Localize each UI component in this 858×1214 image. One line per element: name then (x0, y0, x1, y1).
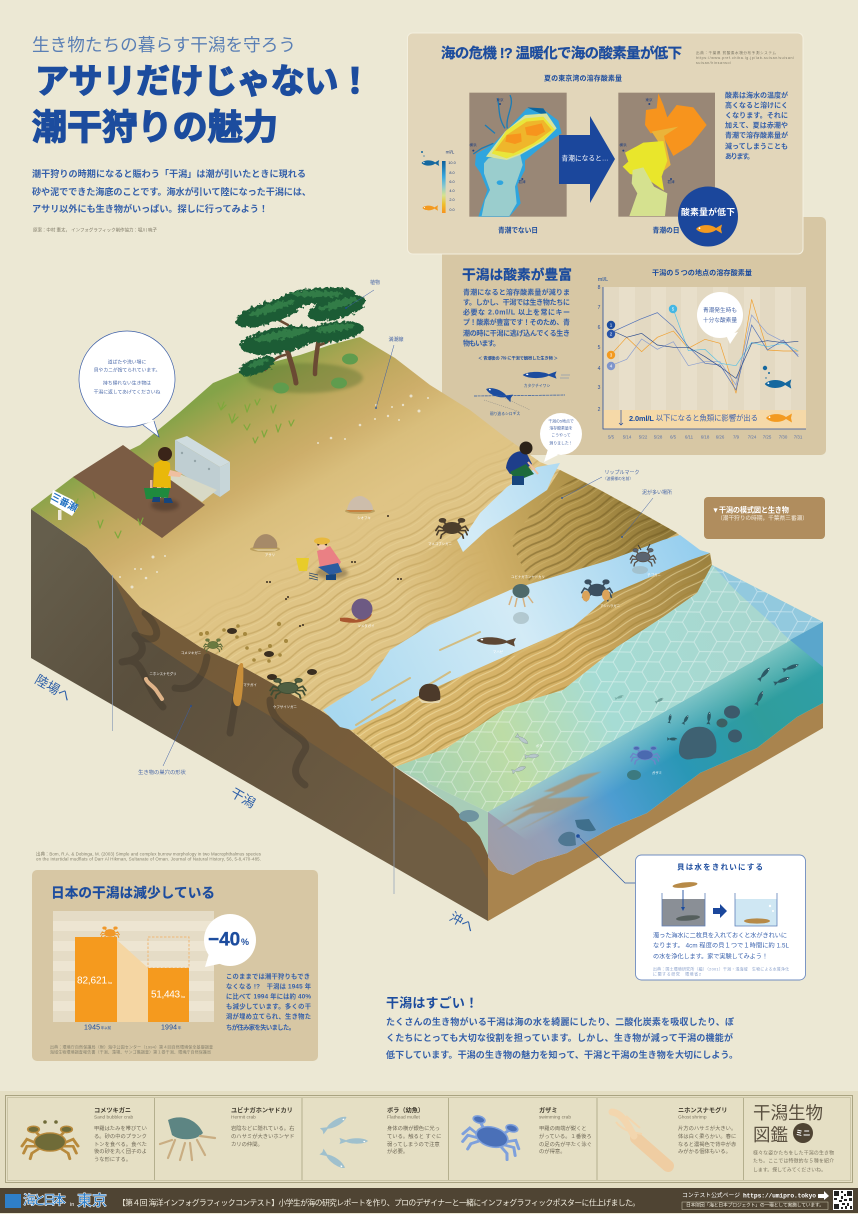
source: https://www.pref.chiba.lg.jp/lab-suisan/suisan/ (696, 56, 794, 60)
line chart: dissolved oxygen at five sites: 6/26 (716, 434, 725, 440)
top surface: hill and beach (31, 337, 712, 767)
creature labels: ガザミ (652, 770, 662, 775)
annotation lines and labels: 泥が多い場所 (642, 489, 672, 496)
logo: 東京 (77, 1192, 107, 1210)
source: burrow: 出典：Bom, R.A. & Dobinga, M. (2003) Simple and complex burrow morphology in two Macrophthalmus species (36, 850, 262, 858)
heading: 日本の干潟は減少している (51, 884, 215, 900)
legend: 6.0 (449, 180, 455, 184)
grass clumps (273, 354, 358, 394)
rocks and clams in the water (459, 706, 742, 846)
guide title: たち。ここでは特徴的な５種を紹介 (753, 1158, 834, 1164)
body text (463, 288, 570, 348)
line chart: dissolved oxygen at five sites: 6/11 (685, 434, 694, 440)
creature labels: ケフサイソガニ (273, 704, 297, 709)
icon: orange fish (766, 414, 792, 422)
guide title: ミニ (796, 1128, 810, 1138)
icon: clam (345, 496, 375, 514)
line chart: dissolved oxygen at five sites: 4 (610, 364, 613, 368)
subtitle: 生き物たちの暮らす干潟を守ろう (32, 35, 296, 55)
heading: 海の危機 !? 温暖化で海の酸素量が低下 (441, 44, 682, 62)
threshold label (619, 410, 758, 425)
card: swimming crab: のが得意。 (539, 1147, 566, 1155)
text block: tidal flats are amazing (386, 996, 738, 1060)
guide title: 干潟生物 (753, 1103, 823, 1123)
logo: in (70, 1202, 74, 1208)
experiment illustration (662, 881, 777, 926)
line chart: dissolved oxygen at five sites: 5 (598, 345, 601, 351)
source: 出典：千葉県 貧酸素水塊分布予測システム (696, 50, 776, 55)
guide title (753, 1103, 834, 1174)
line chart: dissolved oxygen at five sites: 1 (610, 322, 613, 328)
card: sand bubbler crab: うな形にする。 (94, 1155, 131, 1163)
annotation lines and labels: （波模様の名前） (603, 476, 633, 481)
seabed weeds (497, 772, 602, 832)
source: suisan/hinsanso/ (696, 61, 731, 65)
creature labels: ニホンスナモグリ (149, 671, 177, 676)
creature labels (149, 515, 662, 775)
card: flathead mullet: Flathead mullet (387, 1114, 420, 1120)
guide title: します。探してみてくださいね。 (753, 1166, 826, 1174)
wash station (168, 436, 230, 502)
icon: mud-dwelling crabs (270, 678, 306, 698)
callout: 青潮発生時も (703, 306, 737, 314)
line chart: dissolved oxygen at five sites: 3 (610, 352, 613, 358)
caption left: 青潮でない日 (498, 226, 538, 234)
card: flathead mullet (319, 1106, 441, 1171)
card: swimming crab (459, 1106, 592, 1162)
bar chart: ha (108, 981, 112, 985)
arrow: blue tide (559, 116, 615, 203)
map labels (469, 97, 526, 184)
icon: swimming crab (631, 747, 659, 764)
callout: -40%: % (241, 937, 249, 947)
card: hermit crab: ユビナガホンヤドカリ (231, 1106, 293, 1114)
sand bottom, right face (488, 703, 823, 921)
icon: dark crab (436, 518, 468, 538)
card: ghost shrimp: 片方のハサミが大きい。 (678, 1124, 736, 1132)
heading: 貝は水をきれいにする (677, 862, 763, 872)
card: sand bubbler crab: る。砂の中のプランク (94, 1132, 147, 1140)
line chart: dissolved oxygen at five sites: 4 (598, 366, 601, 372)
callout: wash station message: 持ち帰れない生き物は (103, 380, 151, 386)
creature labels: アシハラガニ (600, 603, 620, 608)
title: 潮干狩りの魅力 (32, 108, 278, 148)
text block: tidal flats are amazing: たくさんの生き物がいる干潟は海の水を綺麗にしたり、二酸化炭素を吸収したり、ぼ (386, 1016, 734, 1027)
line chart: dissolved oxygen at five sites: 7/31 (794, 434, 803, 440)
badge: oxygen falls: 酸素量が低下 (681, 206, 735, 217)
callout: wash station message: 干潟に返してあげてくださいね (94, 388, 161, 396)
line chart: dissolved oxygen at five sites: 2 (598, 407, 601, 413)
bar chart: 1945 (84, 1024, 100, 1032)
burrow holes and pellets (199, 515, 402, 680)
map labels: 君津 (667, 179, 675, 184)
icon: blue-grey crab (582, 580, 612, 602)
card: hermit crab: Hermit crab (231, 1114, 256, 1120)
creature labels: マテガイ (243, 682, 257, 687)
arrow: blue tide: 青潮になると… (562, 154, 608, 162)
text block: tidal flats are amazing: 低下しています。干潟の生き物の魅力を知って、干潟と干潟の生き物を大切にしよう。 (386, 1049, 738, 1060)
card: hermit crab (160, 1106, 295, 1160)
icon: razor clam (233, 663, 243, 706)
official page: https://umipro.tokyo (743, 1192, 816, 1200)
direction labels: 陸場へ (32, 672, 74, 704)
tag: diagram caption (704, 497, 825, 539)
body text: このままでは潮干狩りもでき (226, 972, 310, 980)
water side, left (395, 767, 488, 855)
body text (226, 972, 312, 1032)
observed creatures: 弱り逃るシロギス (490, 411, 520, 416)
observed creatures (474, 354, 570, 416)
source: burrow (36, 850, 262, 862)
line chart: dissolved oxygen at five sites: 干潟の５つの地点の溶存酸素量 (652, 268, 752, 277)
creature labels: コメツキガニ (181, 650, 201, 655)
side text (725, 90, 788, 160)
bar chart: 年 (178, 1025, 182, 1030)
creature labels: シオフキ (357, 515, 371, 520)
icon: ghost shrimp (146, 679, 162, 699)
line chart: dissolved oxygen at five sites: 8 (598, 285, 601, 291)
body text: プ！酸素が豊富です！そのため、青 (463, 318, 570, 326)
card: ghost shrimp: みがかる個体もいる。 (678, 1147, 731, 1155)
body text: 青潮になると溶存酸素量が減りま (463, 288, 570, 296)
creature labels: ユビナガホンヤドカリ (511, 574, 545, 579)
callout: 十分な酸素量 (703, 316, 737, 324)
source (50, 1044, 213, 1054)
icon: blue fish (763, 366, 791, 389)
side text: 加えて、夏は赤潮や (725, 120, 788, 130)
card: sand bubbler crab (22, 1106, 147, 1163)
muddy sand band (380, 470, 677, 640)
creatures on the beach (146, 496, 662, 775)
annotation lines and labels: リップルマーク (604, 470, 640, 476)
water front face (488, 622, 823, 875)
callout: wash station message (79, 331, 175, 437)
sea surface (395, 565, 823, 812)
callout: measuring (540, 413, 582, 462)
body text: 物もいます。 (463, 338, 500, 348)
card: hermit crab: 岩陰などに隠れている。右 (231, 1124, 294, 1132)
card: sand bubbler crab: トンを食べる。食べた (94, 1141, 147, 1148)
annotation lines and labels (112, 279, 672, 894)
icon: fiddler crab (630, 544, 656, 574)
card: hermit crab: のハサミが大きいホンヤド (231, 1132, 295, 1140)
line chart: dissolved oxygen at five sites: 6 (598, 325, 601, 331)
icon: hermit crab (509, 584, 533, 624)
brown path (73, 445, 205, 538)
footer (0, 1188, 858, 1213)
legend: 2.0 (449, 198, 455, 202)
channel sand streaks (356, 595, 640, 725)
body text: 必要な 2.0ml/L 以上を常にキー (463, 308, 570, 316)
side text: 酸素は海水の温度が (725, 90, 788, 100)
callout: wash station message: 貝やカニが捨てられています。 (94, 366, 160, 374)
burrows (122, 613, 306, 785)
mullet fry (511, 733, 539, 774)
bar chart: 年以前 (101, 1025, 112, 1030)
logo: 海と日本 (23, 1192, 66, 1208)
chart heading: 夏の東京湾の溶存酸素量 (544, 74, 622, 82)
panel: mini field guide (0, 1091, 858, 1188)
line chart: dissolved oxygen at five sites: 6/5 (670, 434, 677, 440)
card: hermit crab: カリの仲間。 (231, 1140, 263, 1148)
body text: なります。 4cm 程度の貝１つで１時間に約 1.5L (653, 942, 790, 950)
creature labels: チゴガニ (647, 572, 661, 577)
callout: measuring: 測りました！ (549, 440, 573, 446)
card: flathead mullet: ている。触ると すぐに (387, 1132, 441, 1140)
map labels: 横浜 (619, 142, 627, 147)
map: blue tide day (618, 93, 715, 217)
card: sand bubbler crab: コメツキガニ (94, 1106, 131, 1114)
side text: くなります。それに (725, 110, 788, 120)
observed creatures: ＜ 青潮後の 7/9 に干潟で観察した生き物 ＞ (478, 354, 558, 362)
card: flathead mullet: ボラ（幼魚） (387, 1106, 424, 1114)
line chart: dissolved oxygen at five sites: 3 (598, 385, 601, 391)
body text: も減少しています。多くの干 (226, 1002, 311, 1010)
map labels: 東京 (645, 97, 653, 102)
legend: 10.0 (448, 161, 456, 165)
legend: 0.0 (449, 208, 455, 212)
line chart: dissolved oxygen at five sites: 2 (610, 332, 613, 336)
side text: 高くなると溶けにく (725, 100, 788, 110)
body text: なくなる !? 干潟は 1945 年 (226, 982, 312, 990)
direction labels: 沖へ (447, 909, 477, 935)
line chart: dissolved oxygen at five sites: 5/28 (654, 434, 663, 440)
card: ghost shrimp: 体は白く柔らかい。春に (678, 1132, 736, 1140)
annotation lines and labels: 植物 (370, 279, 380, 286)
card: flathead mullet: が必要。 (387, 1147, 408, 1155)
body text: 潟が埋め立てられ、生き物た (226, 1012, 311, 1020)
creature labels: ツメタガイ (358, 623, 374, 628)
callout: measuring: こうやって (551, 432, 571, 438)
bar chart (53, 911, 214, 1032)
line chart: dissolved oxygen at five sites: 6/18 (701, 434, 710, 440)
fish in the water (615, 662, 799, 741)
cross-section soil (31, 509, 488, 921)
map labels: 横浜 (469, 142, 477, 147)
legend: 4.0 (449, 189, 455, 193)
badge: oxygen falls (678, 186, 738, 246)
callout: wash station message: 道ばたや洗い場に (108, 358, 146, 366)
crouching man (506, 442, 538, 485)
credit: 原案：中村 憲太， インフォグラフィック制作協力：堀川 暁子 (33, 226, 158, 234)
legend: ml/L (446, 150, 455, 154)
boy (144, 447, 182, 511)
foam dots (119, 394, 429, 588)
side text: あります。 (725, 152, 754, 160)
side text: 減ってしまうことも (725, 142, 788, 150)
map labels: 君津 (518, 179, 526, 184)
sign: Sanbanze: 三番瀬 (49, 491, 80, 515)
bar chart: 1994 (161, 1024, 177, 1032)
bar chart: 82,621 (77, 976, 107, 986)
observed creatures: カタクチイワシ (524, 383, 550, 388)
callout: -40% (204, 914, 256, 967)
side text: 青潮で溶存酸素量が (725, 130, 788, 140)
guide title: 様々な姿かたちをした干潟の生き物 (753, 1150, 834, 1156)
map labels (619, 97, 675, 184)
line chart: dissolved oxygen at five sites (598, 268, 806, 440)
intro text: 砂や泥でできた海底のことです。海水が引いて陸になった干潟には、 (32, 186, 311, 197)
contest text: 【第４回 海洋インフォグラフィックコンテスト】小学生が海の研究レポートを作り、プロのデザイナーと一緒にインフォグラフィックポスターに仕上げました。 (118, 1198, 640, 1208)
map labels: 東京 (496, 97, 504, 102)
line chart: dissolved oxygen at five sites: 7/24 (748, 434, 757, 440)
icon: dark shell (417, 684, 443, 703)
caption right: 青潮の日 (652, 226, 680, 234)
bar chart: 51,443 (151, 990, 180, 1000)
pine tree (232, 285, 369, 393)
text block: tidal flats are amazing: 干潟はすごい！ (386, 996, 478, 1010)
panel: ocean crisis (408, 33, 803, 254)
ripples on beach (184, 450, 679, 762)
body text: 潮の時に干潟に逃げ込んでくる生き (463, 328, 570, 338)
line chart: dissolved oxygen at five sites: 5/5 (608, 434, 615, 440)
card: swimming crab: 甲羅の両端が鋭くと (539, 1124, 587, 1132)
source: burrow: on the intertidal mudflats of Darr Al Hikman, Sultanate of Oman. Journal of Natural History, 56, 5-8,470-485. (36, 856, 261, 862)
upper tide pool (457, 463, 560, 552)
panel: shellfish clean water (636, 855, 806, 980)
callout: -40%: −40 (208, 930, 240, 950)
heading: 干潟は酸素が豊富 (462, 266, 572, 282)
panel: tidal flats are decreasing (32, 870, 318, 1061)
icon: ribbed shell (250, 534, 280, 552)
card: sand bubbler crab: 甲羅はたみを帯びてい (94, 1124, 147, 1132)
source (696, 50, 794, 65)
lower sand band (352, 553, 712, 767)
line chart: dissolved oxygen at five sites: 5/14 (623, 434, 632, 440)
body text (653, 932, 790, 960)
body text: す。しかし、干潟では生き物たちに (463, 298, 570, 306)
tidal channel (323, 535, 710, 730)
annotation lines and labels: 生き物の巣穴の形状 (138, 768, 187, 776)
girl (296, 538, 348, 580)
intro text (32, 168, 311, 214)
card: sand bubbler crab: Sand bubbler crab (94, 1114, 134, 1120)
body text: 濁った海水に二枚貝を入れておくと水がきれいに (653, 932, 787, 940)
creature labels: アサリ (265, 552, 275, 557)
official page: 日本財団「海と日本プロジェクト」の一環として実施しています。 (686, 1201, 824, 1208)
map: normal day (469, 93, 567, 217)
annotation lines and labels: 満潮線 (388, 336, 404, 343)
card: sand bubbler crab: 後の砂を丸く団子のよ (94, 1147, 147, 1155)
card: swimming crab: の足の先が平たく泳ぐ (539, 1140, 592, 1148)
connector to clam panel (576, 834, 636, 883)
callout (697, 292, 743, 344)
line chart: dissolved oxygen at five sites: ml/L (598, 277, 608, 283)
title (32, 63, 372, 148)
direction labels (32, 672, 477, 935)
text block: tidal flats are amazing: くたちにとっても大切な役割を担っています。しかし、生き物が減って干潟の機能が (386, 1032, 733, 1043)
line chart: dissolved oxygen at five sites: 5 (672, 306, 675, 312)
creature labels: ボラ (536, 743, 542, 748)
QR code (833, 1190, 853, 1210)
logo (5, 1192, 107, 1210)
card: swimming crab: ガザミ (539, 1106, 558, 1114)
line chart: dissolved oxygen at five sites: 5/22 (639, 434, 648, 440)
card: flathead mullet: 弱ってしまうので注意 (387, 1140, 440, 1148)
body text: ちが住み家を失いました。 (226, 1022, 295, 1032)
landscape: tidal flat cross-section diagram (31, 337, 823, 921)
legend: 8.0 (449, 171, 455, 175)
tag: diagram caption: ▼干潟の模式図と生き物 (712, 506, 789, 514)
line chart: dissolved oxygen at five sites: 7/9 (733, 434, 740, 440)
card: ghost shrimp: Ghost shrimp (678, 1114, 707, 1120)
title: アサリだけじゃない！ (35, 63, 372, 101)
official page: コンテスト公式ページ (682, 1191, 740, 1199)
line chart: dissolved oxygen at five sites: 7 (598, 305, 601, 311)
card: ghost shrimp: ニホンスナモグリ (678, 1106, 727, 1114)
icon: moon snail (340, 598, 372, 623)
card: swimming crab: swimming crab (539, 1114, 571, 1120)
creature labels: マハゼ (493, 649, 504, 654)
grass tufts (72, 399, 294, 538)
source (653, 966, 789, 976)
card: ghost shrimp: なると濃褐色で背中が赤 (678, 1140, 737, 1148)
source: 出典：国土環境研究所（編）（2001）干潟・浅海域 生物による水質浄化 (653, 966, 789, 972)
card: ghost shrimp (612, 1106, 737, 1166)
source: に関する研究 環境省2 (653, 972, 701, 976)
body text: の水を浄化します。家で実験してみよう！ (653, 952, 768, 960)
line chart: dissolved oxygen at five sites: 7/30 (779, 434, 788, 440)
bar chart: ha (181, 995, 185, 999)
creature labels: マメコブシガニ (428, 541, 452, 546)
official page (682, 1191, 829, 1210)
icon: orange crab (101, 927, 119, 940)
callout: measuring: 溶存酸素量を (549, 426, 573, 430)
legend (421, 150, 456, 213)
threshold label: 2.0ml/L 以下になると魚類に影響が出る (629, 414, 758, 422)
intro text: 潮干狩りの時期になると賑わう「干潟」は潮が引いたときに現れる (32, 168, 306, 179)
line chart: dissolved oxygen at five sites: 7/25 (763, 434, 772, 440)
body text: に比べて 1994 年には約 40% (226, 992, 311, 1000)
source: 出典：環境庁自然保護局（財）海中公園センター（1994）第４回自然環境保全基礎調査 (50, 1044, 213, 1050)
card: flathead mullet: 身体の横が銀色に光っ (387, 1124, 440, 1132)
callout: measuring: 干潟の5地点で (548, 418, 574, 424)
source: 海域生物環境調査報告書（干潟、藻場、サンゴ礁調査）第１巻干潟、環境庁自然保護局 (50, 1048, 211, 1054)
tag: diagram caption: （潮干狩りの時期，千葉県三番瀬） (717, 514, 808, 522)
intro text: アサリ以外にも生き物がいっぱい。探しに行ってみよう！ (32, 203, 268, 214)
direction labels: 干潟 (228, 785, 258, 811)
card: swimming crab: がっている。１番後ろ (539, 1132, 592, 1140)
guide title: 図鑑 (753, 1125, 788, 1145)
icon: goby (476, 636, 516, 647)
